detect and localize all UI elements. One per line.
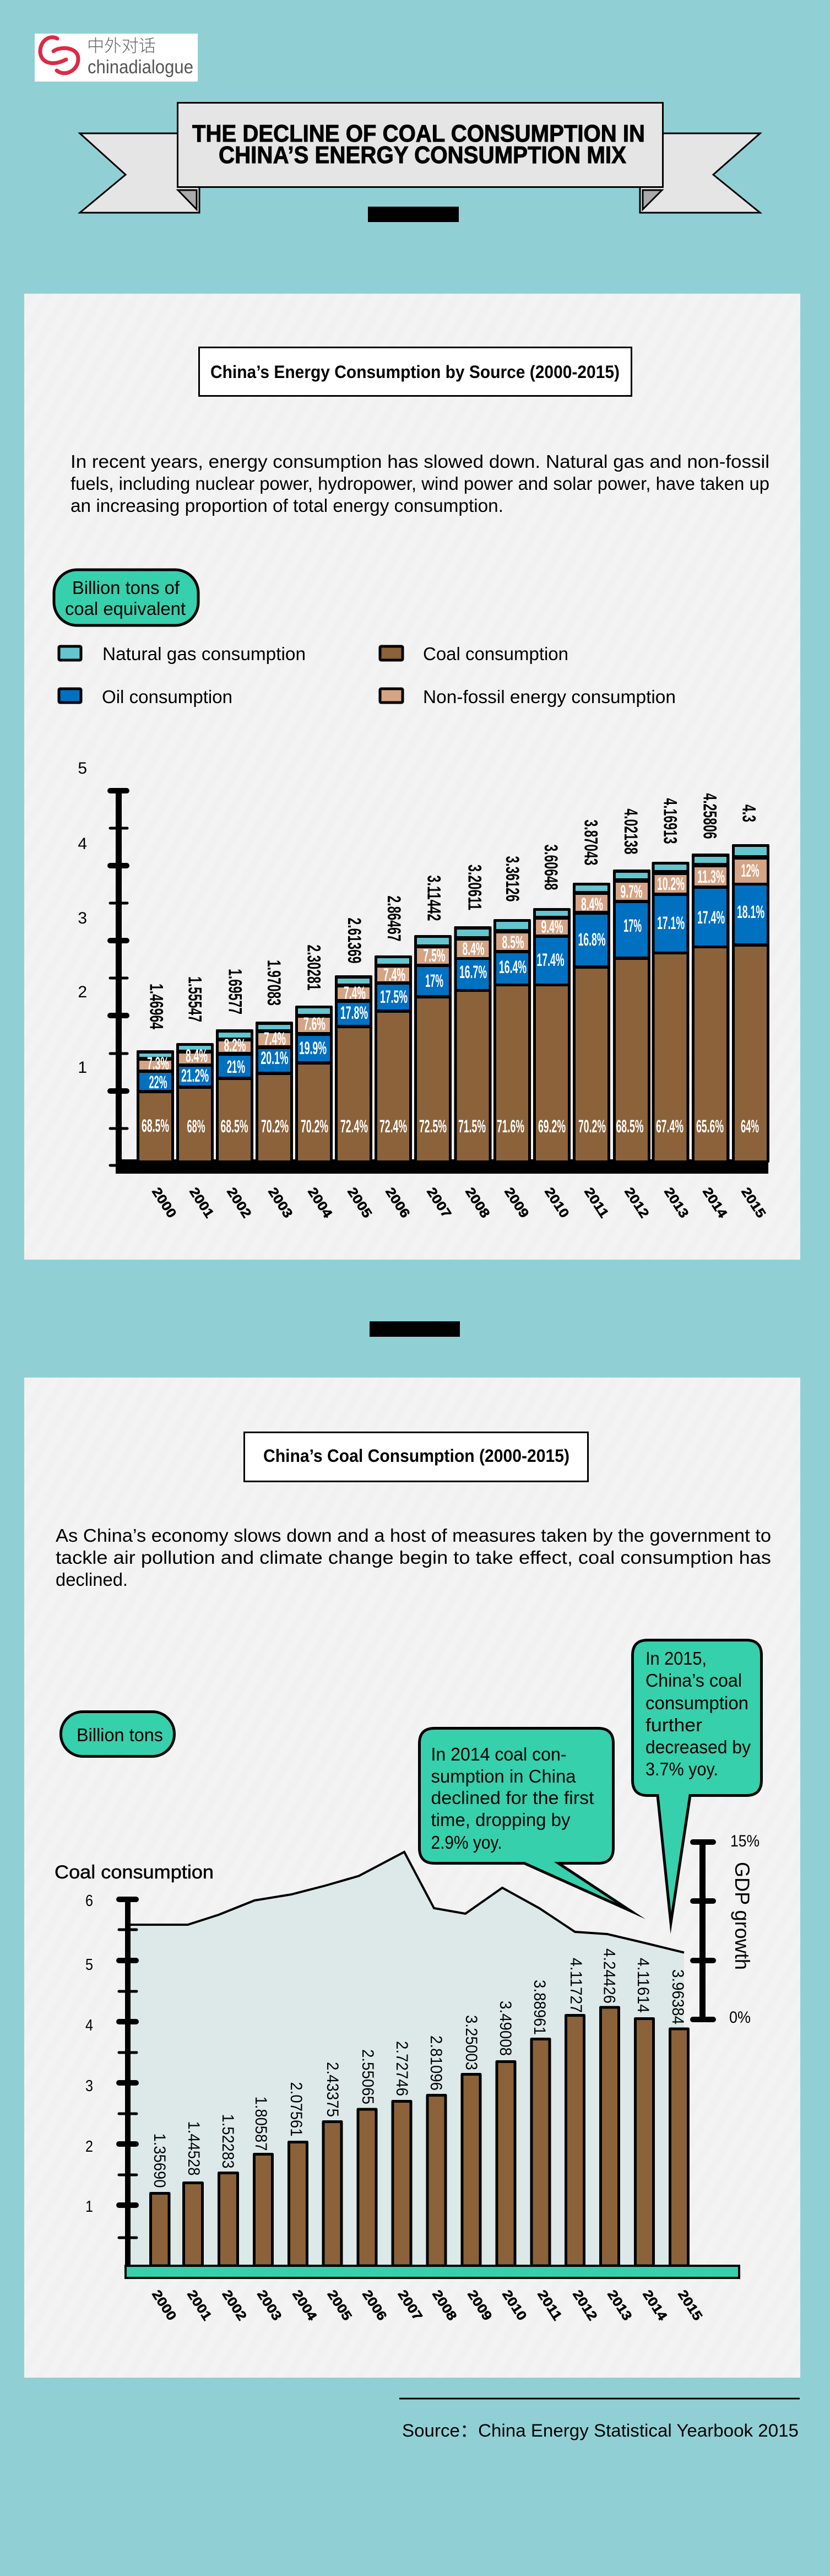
legend: Coal consumption	[423, 644, 568, 664]
title ribbon: CHINA’S ENERGY CONSUMPTION MIX	[219, 142, 626, 169]
coal bars and value labels: 2.81096	[427, 2035, 445, 2091]
bar 2007: 2007	[424, 1185, 454, 1221]
unit pill: billion tons: Billion tons	[77, 1725, 163, 1745]
logo: chinadialogue: chinadialogue	[88, 57, 193, 78]
bar 2001: 21.2%	[181, 1066, 209, 1086]
callout: 2014 decline: 2.9% yoy.	[431, 1832, 502, 1853]
bar 2010: 2010	[541, 1185, 572, 1221]
bar 2009: 71.6%	[497, 1116, 524, 1136]
black divider 2	[370, 1321, 460, 1337]
panel: energy consumption by source	[24, 294, 800, 1260]
bar 2002: 2002	[224, 1185, 254, 1221]
panel: coal consumption	[24, 1378, 800, 2378]
bar 2001	[176, 976, 216, 1221]
source: Source：China Energy Statistical Yearbook 2015	[402, 2421, 799, 2440]
bar 2009	[493, 856, 531, 1221]
bar 2006: 17.5%	[380, 987, 408, 1007]
y axis: 5	[78, 759, 87, 777]
bar 2007: 17%	[425, 971, 443, 991]
bar 2014: 65.6%	[696, 1116, 724, 1136]
bar 2014: 4.25806	[699, 793, 720, 839]
bar 2004: 2004	[305, 1185, 335, 1221]
bar 2015: 18.1%	[737, 902, 764, 922]
bar 2011: 70.2%	[578, 1116, 606, 1136]
year labels: 2000	[149, 2287, 179, 2323]
y axis: coal	[85, 1892, 137, 2266]
callout: 2015 decline: decreased by	[645, 1737, 751, 1757]
bar 2006: 2.86467	[383, 896, 404, 941]
bar 2000: 68.5%	[142, 1116, 169, 1136]
heading: energy consumption by source: China’s Energy Consumption by Source (2000-2015)	[210, 362, 620, 382]
logo: chinadialogue	[35, 34, 198, 82]
coal bars and value labels: 3.96384	[669, 1969, 687, 2024]
bar 2005: 17.8%	[340, 1003, 368, 1023]
y axis: 1	[78, 1059, 87, 1077]
bar 2015	[732, 804, 769, 1221]
bar 2011: 8.4%	[581, 894, 603, 914]
bar 2003: 1.97083	[263, 960, 284, 1006]
coal bars and value labels: 2.72746	[393, 2041, 411, 2096]
bar 2004: 70.2%	[301, 1116, 328, 1136]
year labels: 2012	[569, 2287, 600, 2323]
legend: Natural gas consumption	[102, 644, 306, 664]
year labels: 2009	[464, 2287, 495, 2323]
area: GDP growth line	[131, 1852, 684, 2266]
year labels: 2004	[289, 2287, 320, 2324]
bar 2015: 64%	[741, 1116, 759, 1136]
bar 2010: 3.60648	[540, 844, 561, 890]
bar 2008: 2008	[462, 1185, 492, 1221]
year labels: 2005	[324, 2287, 355, 2323]
x axis baseline	[116, 1159, 768, 1174]
bar 2012	[613, 809, 652, 1221]
y axis: 3	[78, 909, 87, 927]
x axis baseline	[126, 2266, 739, 2278]
callout: 2015 decline: consumption	[645, 1693, 748, 1713]
y axis: coal: 5	[85, 1956, 93, 1974]
bar 2006: 7.4%	[383, 965, 405, 985]
GDP growth axis: 0%	[729, 2008, 751, 2027]
year labels: 2011	[534, 2287, 565, 2323]
callout: 2015 decline: 3.7% yoy.	[645, 1759, 718, 1779]
unit pill: billion tons	[61, 1711, 174, 1757]
bar 2013: 17.1%	[657, 913, 685, 933]
coal bars and value labels: 3.88961	[530, 1980, 549, 2035]
bar 2008: 16.7%	[459, 962, 487, 982]
GDP growth axis: 15%	[730, 1832, 760, 1850]
callout: 2014 decline: declined for the first	[431, 1787, 594, 1808]
callout: 2014 decline: In 2014 coal con-	[431, 1744, 566, 1764]
chart: coal consumption and GDP growth	[85, 1640, 761, 2324]
bar 2013: 4.16913	[660, 798, 681, 844]
year labels: 2015	[675, 2287, 705, 2323]
bar 2003: 2003	[265, 1185, 295, 1221]
year labels: 2007	[395, 2287, 425, 2323]
bar 2008: 71.5%	[458, 1116, 486, 1136]
unit pill: billion tons of coal equivalent	[54, 570, 198, 625]
unit pill: billion tons of coal equivalent: coal equivalent	[65, 598, 186, 619]
coal bars and value labels: 3.49008	[496, 2001, 514, 2056]
bar 2009: 2009	[501, 1185, 531, 1221]
intro text: tackle air pollution and climate change begin to take effect, coal consumption has	[56, 1547, 771, 1568]
y axis: 2	[78, 983, 87, 1001]
bar 2002: 1.69577	[225, 969, 246, 1014]
bar 2010: 17.4%	[536, 950, 564, 970]
bar 2007: 7.5%	[423, 946, 445, 965]
bar 2001: 1.55547	[184, 976, 205, 1022]
coal bars and value labels: 3.25003	[462, 2015, 480, 2070]
coal bars and value labels	[150, 1948, 688, 2266]
bar 2007: 72.5%	[419, 1116, 447, 1136]
bar 2011	[573, 820, 611, 1221]
bar 2004	[295, 944, 335, 1221]
legend: Oil consumption	[102, 687, 232, 707]
bar 2014: 11.3%	[697, 867, 725, 887]
bar 2001: 68%	[187, 1116, 205, 1136]
bar 2004: 19.9%	[299, 1038, 327, 1058]
bar 2013: 67.4%	[656, 1116, 683, 1136]
bar 2002	[216, 969, 254, 1221]
intro text: declined.	[56, 1569, 128, 1590]
legend	[59, 644, 676, 707]
bar 2001: 8.4%	[186, 1046, 208, 1066]
bar 2012: 4.02138	[620, 809, 641, 854]
black divider 1	[368, 207, 459, 222]
bar 2015: 4.3	[738, 804, 759, 822]
bar 2008: 8.4%	[463, 939, 485, 959]
bar 2000	[137, 984, 179, 1221]
bar 2008	[454, 865, 492, 1221]
bar 2006: 2006	[382, 1185, 413, 1221]
bar 2005	[335, 918, 375, 1221]
year labels: 2010	[499, 2287, 529, 2323]
coal bars and value labels: 1.44528	[185, 2121, 203, 2175]
y axis	[78, 759, 127, 1165]
y axis: coal: 4	[85, 2017, 93, 2034]
bar 2005: 2005	[344, 1185, 375, 1221]
callout: 2015 decline: further	[645, 1715, 702, 1735]
bar 2008: 3.20611	[464, 865, 485, 910]
stacked bar chart: energy consumption	[78, 759, 769, 1221]
y axis: coal: 3	[85, 2077, 93, 2095]
year labels: 2002	[219, 2287, 249, 2323]
source	[399, 2398, 800, 2440]
coal bars and value labels: 1.80587	[252, 2096, 270, 2151]
bar 2009: 3.36126	[502, 856, 523, 901]
year labels: 2001	[184, 2287, 214, 2323]
bar 2015: 12%	[741, 861, 759, 881]
bar 2014: 17.4%	[697, 908, 725, 927]
coal bars and value labels: 4.24426	[600, 1948, 618, 2003]
bar 2012: 17%	[623, 916, 642, 936]
callout: 2014 decline: sumption in China	[431, 1766, 576, 1786]
year labels: 2003	[254, 2287, 284, 2323]
title ribbon	[80, 102, 760, 213]
heading: energy consumption by source	[199, 347, 631, 396]
bar 2005: 7.4%	[344, 983, 366, 1003]
year labels: 2013	[604, 2287, 634, 2323]
coal bars and value labels: 2.07561	[287, 2082, 305, 2137]
intro text: an increasing proportion of total energy consumption.	[70, 495, 503, 516]
coal bars and value labels: 1.52283	[219, 2114, 237, 2169]
bar 2010: 9.4%	[541, 917, 563, 937]
logo: chinadialogue: 中外对话	[87, 36, 156, 56]
bar 2010	[533, 844, 572, 1221]
coal bars and value labels: 1.35690	[150, 2134, 169, 2188]
bar 2009: 8.5%	[502, 932, 524, 952]
bar 2000: 1.46964	[145, 984, 166, 1029]
coal bars and value labels: 2.55065	[359, 2049, 377, 2104]
bar 2011: 16.8%	[578, 930, 606, 949]
bar 2000: 2000	[149, 1185, 179, 1221]
legend: Non-fossil energy consumption	[423, 687, 676, 707]
bar 2012: 9.7%	[620, 882, 642, 901]
bar 2010: 69.2%	[538, 1116, 566, 1136]
bar 2001: 2001	[186, 1185, 216, 1221]
GDP growth axis: GDP growth	[731, 1862, 753, 1970]
y axis: coal: 2	[85, 2138, 93, 2156]
bar 2009: 16.4%	[499, 957, 527, 977]
heading: coal consumption: China’s Coal Consumption (2000-2015)	[263, 1446, 569, 1466]
bar 2007: 3.11442	[423, 875, 444, 921]
bar 2013	[652, 798, 691, 1221]
bar 2000: 7.3%	[147, 1054, 169, 1073]
intro text: As China’s economy slows down and a host of measures taken by the government to	[56, 1525, 771, 1546]
callout: 2014 decline	[420, 1728, 631, 1911]
bar 2003: 70.2%	[261, 1116, 289, 1136]
y axis: coal: 1	[85, 2198, 93, 2216]
bar 2013: 10.2%	[657, 874, 685, 894]
year labels	[149, 2287, 705, 2324]
intro text	[70, 451, 769, 516]
bar 2002: 8.2%	[224, 1035, 246, 1055]
coal bars and value labels: 4.11614	[634, 1958, 652, 2013]
bar 2004: 7.6%	[303, 1014, 326, 1034]
bar 2003	[256, 960, 295, 1221]
y axis: coal: 6	[85, 1892, 93, 1910]
coal bars and value labels: 2.43375	[323, 2062, 341, 2117]
year labels: 2008	[429, 2287, 459, 2323]
title ribbon: THE DECLINE OF COAL CONSUMPTION IN	[192, 120, 645, 147]
coal bars and value labels: 4.11727	[567, 1958, 585, 2013]
bar 2013: 2013	[661, 1185, 691, 1221]
bar 2012: 68.5%	[616, 1116, 643, 1136]
axis title: coal consumption: Coal consumption	[55, 1862, 214, 1883]
year labels: 2006	[359, 2287, 389, 2323]
bar 2004: 2.30281	[303, 944, 324, 991]
bar 2000: 22%	[149, 1072, 167, 1092]
callout: 2015 decline	[632, 1640, 761, 1923]
callout: 2014 decline: time, dropping by	[431, 1810, 571, 1830]
bar 2005: 2.61369	[344, 918, 365, 963]
bar 2011: 3.87043	[581, 820, 601, 865]
heading: coal consumption	[245, 1433, 588, 1481]
bar 2012: 2012	[621, 1185, 652, 1221]
callout: 2015 decline: China’s coal	[645, 1670, 742, 1691]
bar 2002: 68.5%	[220, 1116, 248, 1136]
bar 2011: 2011	[581, 1185, 611, 1221]
intro text: In recent years, energy consumption has slowed down. Natural gas and non-fossil	[70, 451, 769, 472]
bar 2003: 7.4%	[264, 1029, 286, 1049]
callout: 2015 decline: In 2015,	[645, 1648, 707, 1668]
bar 2014	[692, 793, 730, 1221]
GDP growth axis	[693, 1832, 760, 2027]
y axis: 4	[78, 835, 87, 853]
bar 2006: 72.4%	[379, 1116, 407, 1136]
bar 2015: 2015	[738, 1185, 768, 1221]
bar 2014: 2014	[699, 1185, 730, 1221]
bar 2006	[375, 896, 413, 1221]
unit pill: billion tons of coal equivalent: Billion tons of	[72, 577, 180, 598]
intro text: fuels, including nuclear power, hydropower, wind power and solar power, have taken up	[70, 473, 769, 494]
bar 2003: 20.1%	[261, 1048, 289, 1068]
year labels: 2014	[639, 2287, 670, 2324]
intro text	[56, 1525, 771, 1590]
bar 2005: 72.4%	[340, 1116, 368, 1136]
bar 2002: 21%	[227, 1057, 245, 1077]
bar 2007	[414, 875, 454, 1221]
